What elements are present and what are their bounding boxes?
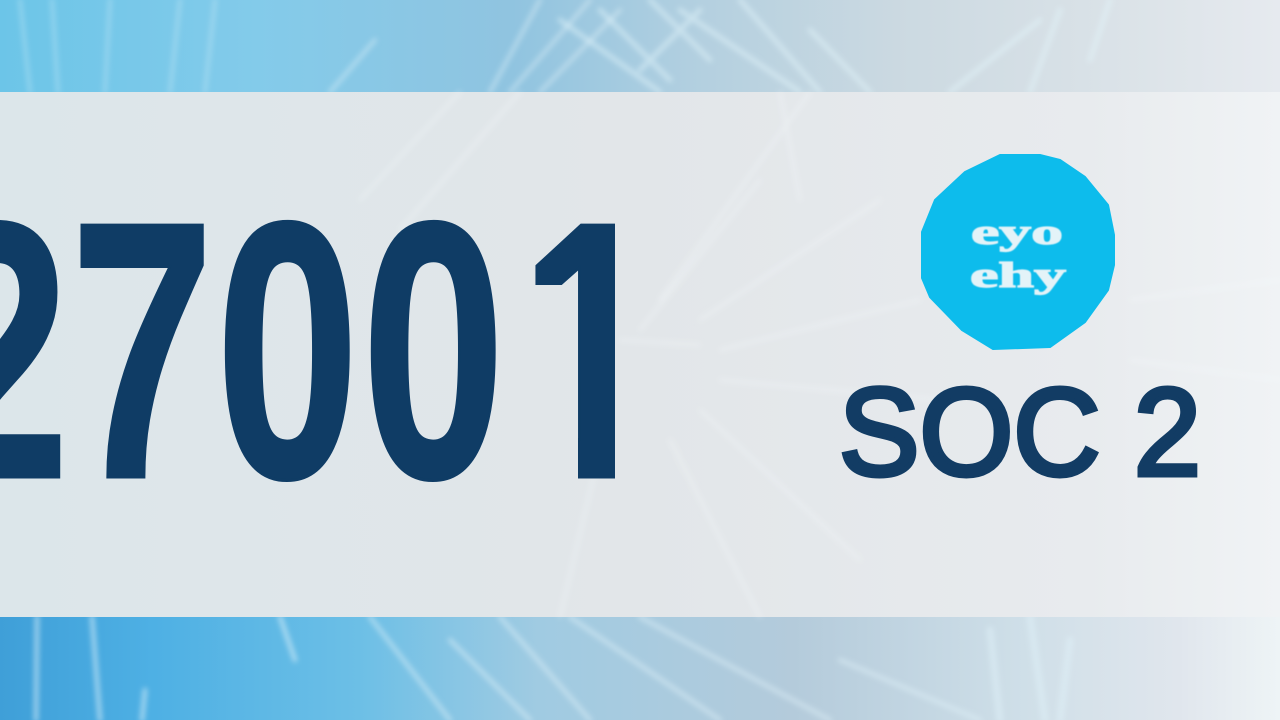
background: fibre strands in bottom band (36, 617, 1070, 720)
label: SOC 2: SOC 2 (839, 364, 1201, 502)
badge text: eyo (971, 212, 1063, 252)
badge text (970, 212, 1066, 295)
background: fibre strands in top band (20, 0, 1110, 92)
background: fibre strands in panel (360, 92, 1280, 617)
background: top band (0, 0, 1280, 92)
badge text: ehy (970, 255, 1066, 295)
heading: 27001 standard number (0, 220, 615, 482)
icon: cyan certification badge (922, 155, 1114, 349)
heading: 27001 standard number: 1 (519, 146, 662, 556)
background: bottom band (0, 617, 1280, 720)
panel: central light banner (0, 92, 1280, 617)
